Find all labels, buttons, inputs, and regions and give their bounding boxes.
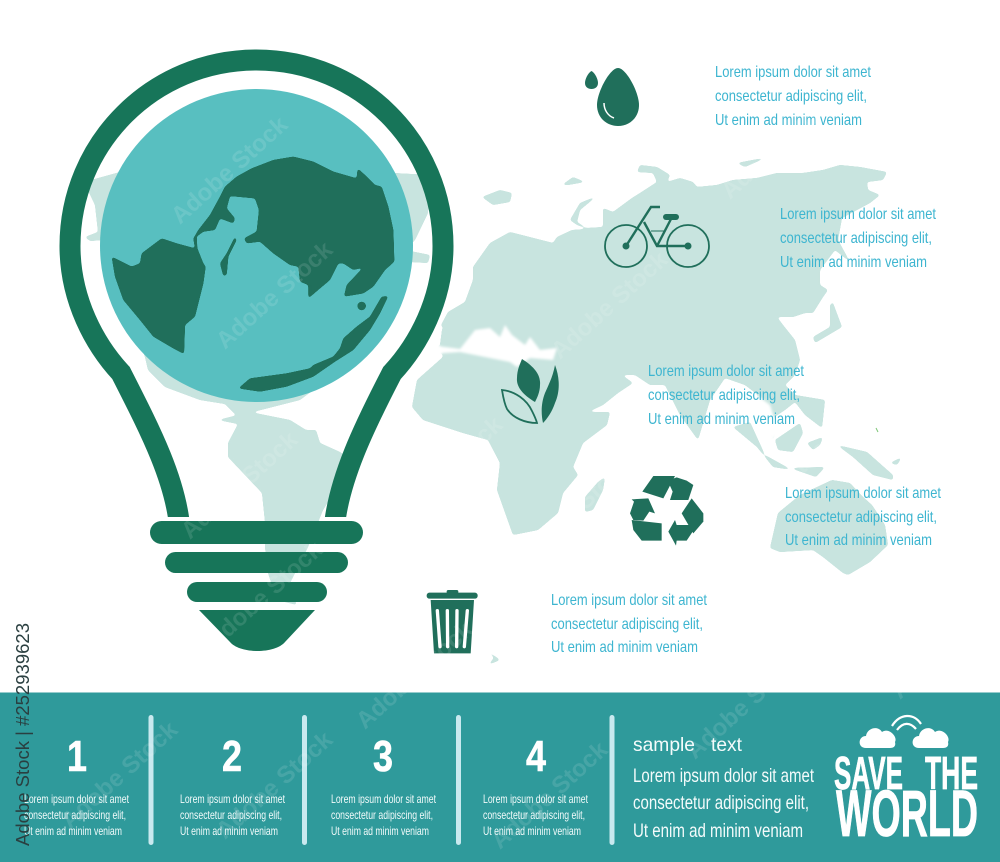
text block 4: Lorem ipsum dolor sit amet xyxy=(785,485,941,502)
logo: save the world xyxy=(834,716,978,850)
step 2: 2 xyxy=(222,732,242,781)
step 1: Lorem ipsum dolor sit amet xyxy=(24,792,129,806)
text block 1: consectetur adipiscing elit, xyxy=(715,88,867,105)
australia xyxy=(770,480,888,575)
text block 5 xyxy=(551,592,707,656)
step 3 xyxy=(331,732,436,838)
text block 3: consectetur adipiscing elit, xyxy=(648,387,800,404)
watermarks: Adobe Stock xyxy=(201,536,329,654)
step 3: 3 xyxy=(373,732,393,781)
sample text block xyxy=(633,734,814,842)
icon: water drops xyxy=(585,68,639,126)
watermarks: Adobe Stock xyxy=(381,411,509,529)
step 1: Ut enim ad minim veniam xyxy=(24,824,122,838)
step 2 xyxy=(180,732,285,838)
watermarks: Adobe Stock xyxy=(681,646,809,764)
watermarks: Adobe Stock xyxy=(211,236,339,354)
text block 2: consectetur adipiscing elit, xyxy=(780,230,932,247)
dividers xyxy=(148,715,614,845)
watermarks: Adobe Stock xyxy=(511,451,639,569)
bulb base xyxy=(150,521,363,651)
text block 3 xyxy=(648,363,804,428)
sample text block: Ut enim ad minim veniam xyxy=(633,820,803,842)
step 3: Ut enim ad minim veniam xyxy=(331,824,429,838)
sample text block: Lorem ipsum dolor sit amet xyxy=(633,765,814,787)
text block 1: Lorem ipsum dolor sit amet xyxy=(715,64,871,81)
step 1: 1 xyxy=(67,732,87,781)
south america xyxy=(218,412,360,605)
icon: trash bin xyxy=(427,590,478,653)
step 2: Lorem ipsum dolor sit amet xyxy=(180,792,285,806)
step 4: Lorem ipsum dolor sit amet xyxy=(483,792,588,806)
sample text block: consectetur adipiscing elit, xyxy=(633,792,809,814)
icon: leaves xyxy=(502,359,559,423)
step 4: 4 xyxy=(526,732,546,781)
text block 5: consectetur adipiscing elit, xyxy=(551,616,703,633)
watermarks: Adobe Stock xyxy=(56,716,184,834)
islands xyxy=(482,190,512,205)
text block 4: Ut enim ad minim veniam xyxy=(785,532,932,549)
step 3: consectetur adipiscing elit, xyxy=(331,808,433,822)
green speck xyxy=(876,428,878,432)
text block 4 xyxy=(785,485,941,549)
continents xyxy=(112,157,394,392)
step 4: consectetur adipiscing elit, xyxy=(483,808,585,822)
sample text block: sample text xyxy=(633,734,743,756)
mediterranean sea xyxy=(430,325,557,367)
text block 3: Ut enim ad minim veniam xyxy=(648,411,795,428)
globe xyxy=(100,89,413,402)
watermarks: Adobe Stock xyxy=(716,426,844,544)
footer band xyxy=(0,692,1000,862)
watermarks: Adobe Stock xyxy=(211,726,339,844)
step 4: Ut enim ad minim veniam xyxy=(483,824,581,838)
text block 1: Ut enim ad minim veniam xyxy=(715,112,862,129)
bulb outline xyxy=(70,60,443,530)
asian sea gaps xyxy=(757,395,778,440)
icon: clouds and signal arcs xyxy=(860,716,949,748)
icon: recycle xyxy=(630,476,703,546)
step 1 xyxy=(24,732,129,838)
text block 4: consectetur adipiscing elit, xyxy=(785,509,937,526)
text block 1 xyxy=(715,64,871,129)
watermarks: Adobe Stock xyxy=(351,616,479,734)
watermarks: Adobe Stock xyxy=(446,151,574,269)
north america xyxy=(84,110,430,416)
text block 5: Lorem ipsum dolor sit amet xyxy=(551,592,707,609)
text block 3: Lorem ipsum dolor sit amet xyxy=(648,363,804,380)
step 2: consectetur adipiscing elit, xyxy=(180,808,282,822)
world map background xyxy=(84,110,902,665)
step 2: Ut enim ad minim veniam xyxy=(180,824,278,838)
watermarks: Adobe Stock xyxy=(486,736,614,854)
text block 5: Ut enim ad minim veniam xyxy=(551,639,698,656)
watermarks: Adobe Stock xyxy=(176,426,304,544)
watermarks: Adobe Stock xyxy=(546,246,674,364)
stock id label: Adobe Stock | #252939623 xyxy=(13,623,33,846)
watermarks: Adobe Stock xyxy=(166,111,294,229)
watermarks: Adobe Stock xyxy=(716,86,844,204)
step 3: Lorem ipsum dolor sit amet xyxy=(331,792,436,806)
logo line: save the: SAVE xyxy=(834,747,903,799)
step 1: consectetur adipiscing elit, xyxy=(24,808,126,822)
text block 2 xyxy=(780,206,936,271)
light bulb xyxy=(70,60,443,651)
eurasia and africa xyxy=(412,165,887,535)
text block 2: Ut enim ad minim veniam xyxy=(780,254,927,271)
step 4 xyxy=(483,732,588,838)
watermarks: Adobe Stock xyxy=(876,251,1000,369)
icon: bicycle xyxy=(605,207,709,267)
text block 2: Lorem ipsum dolor sit amet xyxy=(780,206,936,223)
